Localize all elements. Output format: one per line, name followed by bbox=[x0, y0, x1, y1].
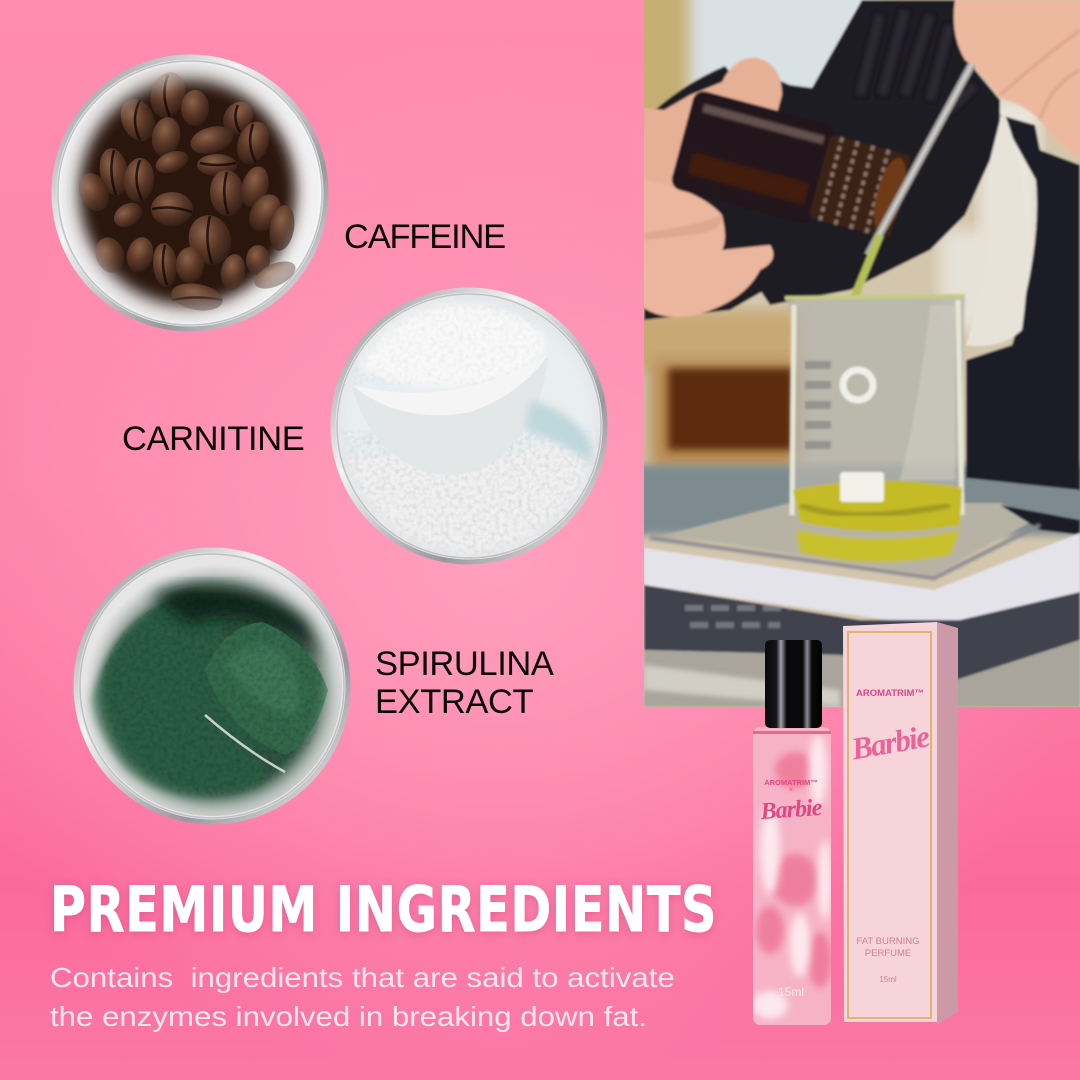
sub: scale plate bbox=[664, 503, 1038, 575]
icon: coffee beans dish bbox=[54, 57, 326, 329]
product text: box volume: 15ml bbox=[879, 975, 897, 984]
icon: white powder dish bbox=[330, 290, 610, 570]
product text: bottle: Barbie bbox=[760, 795, 822, 825]
sub: bottle cap bbox=[765, 640, 822, 728]
sub: bottle body bbox=[752, 727, 832, 1025]
product text: box description: PERFUME bbox=[865, 948, 911, 959]
sub: dark sweater bbox=[760, 0, 1002, 306]
product text: bottle: AROMATRIM™ bbox=[764, 778, 818, 787]
product text: box description bbox=[856, 936, 920, 959]
sub: scale base bbox=[644, 585, 1080, 682]
product text: bottle bbox=[760, 778, 822, 825]
product text: box description: FAT BURNING bbox=[856, 936, 920, 947]
product text: bottle: × bbox=[789, 787, 793, 794]
label: spirulina extract bbox=[375, 645, 554, 721]
product text: bottle volume: 15ml bbox=[778, 985, 804, 999]
label: carnitine: CARNITINE bbox=[122, 420, 304, 458]
title: PREMIUM INGREDIENTS bbox=[50, 873, 717, 946]
icon: green spirulina dish bbox=[76, 550, 348, 822]
label: spirulina extract: SPIRULINA bbox=[375, 645, 554, 683]
sub: dropper bbox=[868, 64, 972, 255]
sub: glass beaker bbox=[784, 297, 966, 502]
sub: carton box bbox=[843, 622, 937, 1022]
label: caffeine: CAFFEINE bbox=[344, 218, 505, 256]
photo: lab scene with dropper and beaker bbox=[630, 0, 1080, 711]
sub: right hand fingers bbox=[954, 0, 1080, 158]
product text: box brand: AROMATRIM™ bbox=[856, 688, 924, 699]
description text: the enzymes involved in breaking down fat. bbox=[50, 1001, 647, 1032]
description text bbox=[50, 962, 675, 1032]
sub: amber bottle bbox=[669, 89, 916, 246]
product: perfume bottle and box bbox=[752, 622, 958, 1025]
sub: blurred backdrop bbox=[630, 0, 1080, 535]
sub: left hand bbox=[644, 58, 782, 200]
label: spirulina extract: EXTRACT bbox=[375, 683, 533, 721]
description text: Contains ingredients that are said to activate bbox=[50, 962, 675, 993]
product text: box logo: Barbie bbox=[849, 719, 931, 766]
